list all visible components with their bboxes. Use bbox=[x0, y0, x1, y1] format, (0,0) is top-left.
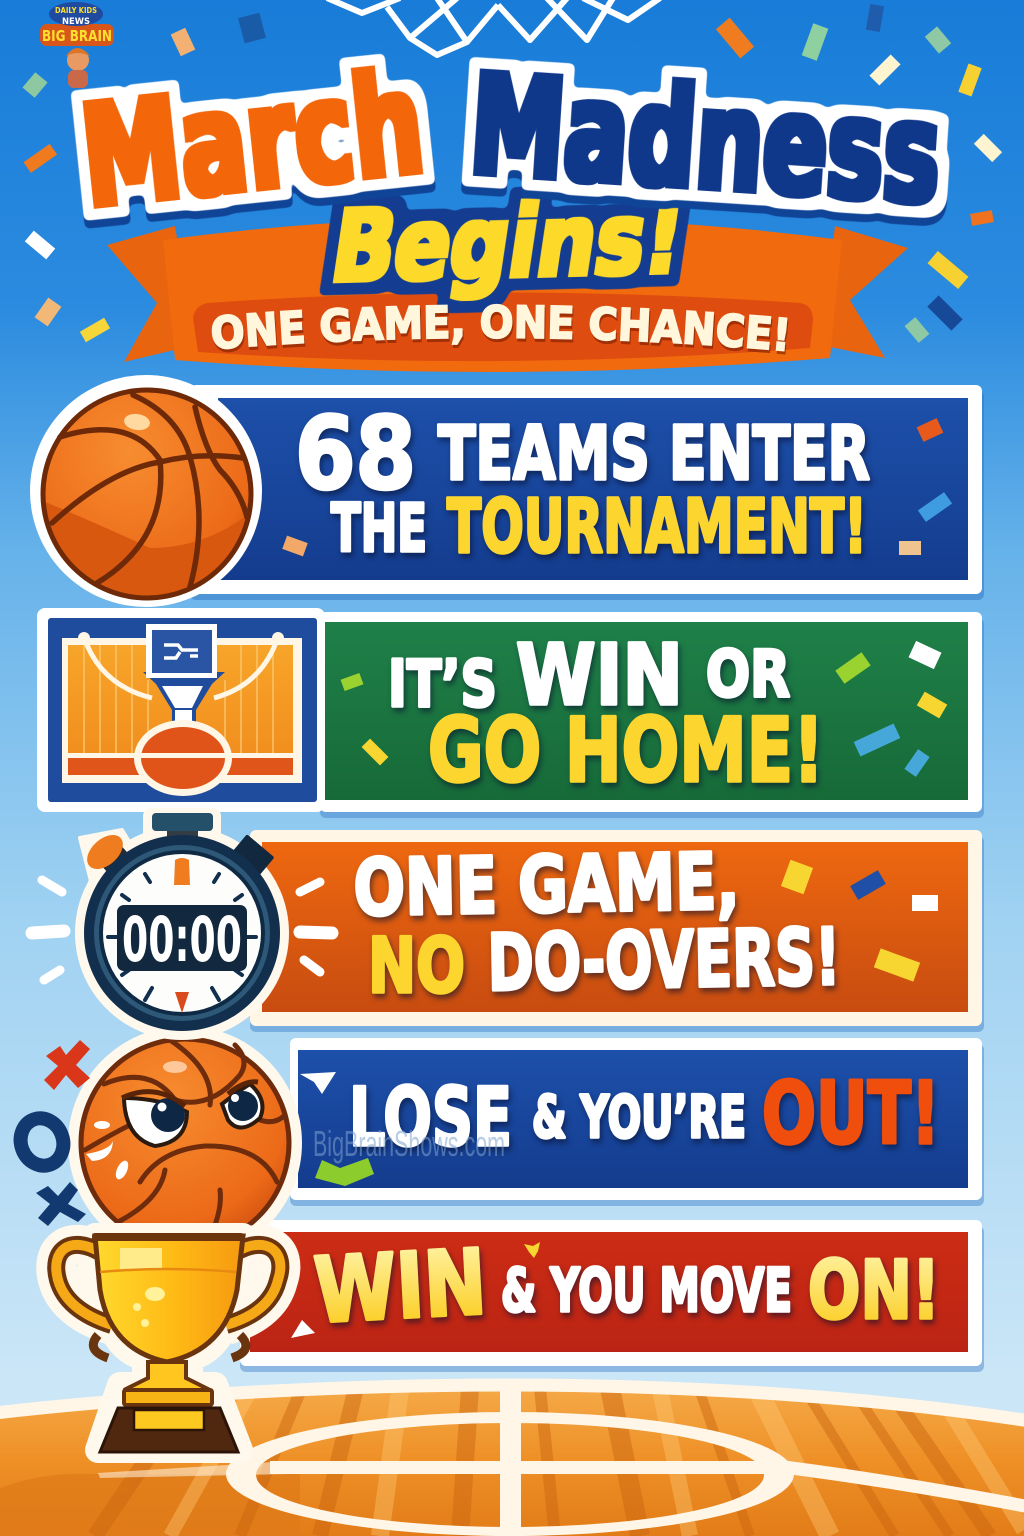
icon: basketball bbox=[30, 375, 262, 610]
trophy handles bbox=[56, 1245, 280, 1358]
confetti bbox=[22, 4, 1002, 343]
panel 2 text: IT’S bbox=[388, 648, 497, 722]
trophy base bbox=[100, 1408, 238, 1452]
icon: crying basketball bbox=[68, 1032, 302, 1226]
hoop stand bbox=[143, 672, 225, 725]
panel 2 text: OR bbox=[706, 638, 790, 712]
basketball net bbox=[327, 0, 660, 55]
watermark: BigBrainShows.com bbox=[313, 1123, 505, 1164]
timer digits: 00:00 bbox=[122, 903, 242, 976]
trophy sticker outline bbox=[56, 1236, 280, 1450]
panel 4 text: OUT! bbox=[762, 1064, 940, 1164]
ribbon label bbox=[193, 292, 813, 361]
panel 5: win bbox=[240, 1220, 984, 1372]
panel 5 text bbox=[312, 1230, 940, 1344]
panel 4 text: LOSE bbox=[349, 1071, 512, 1164]
panel 2 confetti bbox=[341, 641, 947, 777]
panel 1 text bbox=[295, 395, 870, 570]
panel 2: win or go home bbox=[320, 612, 984, 818]
panel 5 text: WIN bbox=[312, 1230, 489, 1344]
logo bbox=[40, 2, 114, 88]
panel 2 text bbox=[388, 626, 824, 802]
icon: trophy bbox=[56, 1233, 280, 1452]
panel 1 text: TEAMS ENTER bbox=[438, 411, 870, 497]
tagline: ONE GAME, ONE CHANCE! bbox=[212, 304, 788, 354]
panel 1 confetti bbox=[282, 418, 952, 556]
banner ribbon bbox=[107, 218, 908, 372]
panel 5 text: ON! bbox=[808, 1244, 940, 1337]
logo badge bbox=[40, 24, 114, 46]
title bbox=[75, 42, 945, 305]
floor bbox=[0, 1385, 1024, 1536]
trophy bowl bbox=[95, 1236, 243, 1362]
panel 1 text: 68 bbox=[295, 395, 416, 512]
title: Begins: Begins! bbox=[324, 181, 691, 305]
panel 3: no do-overs bbox=[250, 830, 984, 1032]
panel 3 confetti bbox=[781, 860, 938, 982]
rays bbox=[32, 880, 332, 980]
panel 5 confetti bbox=[291, 1242, 540, 1338]
panel 3 text: NO bbox=[368, 921, 465, 1010]
panel 3 text bbox=[353, 837, 841, 1010]
panel 1: 68 teams bbox=[190, 385, 984, 600]
ribbon body bbox=[163, 218, 842, 372]
icon: tic-tac-toe marks bbox=[14, 1040, 90, 1226]
logo: DAILY KIDS bbox=[55, 6, 97, 15]
panel 4 text bbox=[349, 1064, 940, 1164]
panel 4 confetti bbox=[300, 1072, 374, 1186]
panel 2 text: GO HOME! bbox=[428, 699, 824, 802]
logo character bbox=[67, 49, 89, 71]
tears bbox=[86, 1141, 113, 1161]
panel 5 text: & YOU MOVE bbox=[501, 1256, 792, 1326]
icon: backboard court bbox=[37, 608, 325, 812]
trophy stem bbox=[124, 1362, 210, 1390]
panel 2 text: WIN bbox=[516, 626, 683, 724]
ribbon tails bbox=[107, 226, 195, 362]
panel 4 text: & YOU’RE bbox=[532, 1083, 746, 1151]
panel 1 text: THE bbox=[331, 490, 427, 567]
title: March: March bbox=[75, 42, 431, 240]
panel 3 text: DO-OVERS! bbox=[487, 913, 841, 1009]
panel 4: lose bbox=[290, 1038, 984, 1206]
panel 3 text: ONE GAME, bbox=[353, 837, 740, 934]
logo: BIG BRAIN bbox=[42, 27, 112, 45]
logo: NEWS bbox=[62, 17, 90, 27]
icon: stopwatch bbox=[32, 808, 332, 1040]
eyes bbox=[124, 1098, 187, 1146]
